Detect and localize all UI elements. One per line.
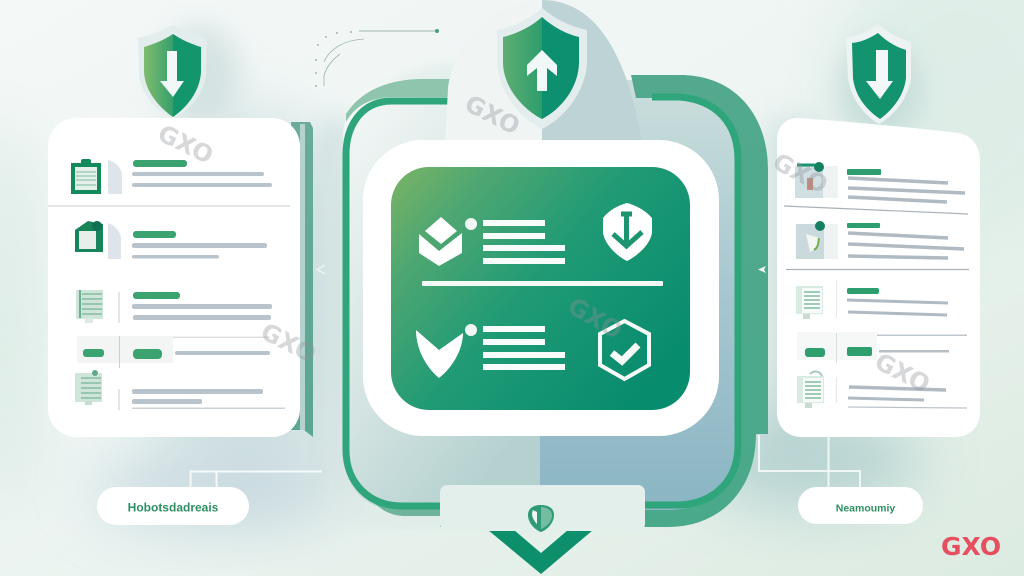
- main white card: [363, 140, 719, 436]
- row 4: [77, 336, 270, 368]
- icon: diamond box: [419, 217, 462, 266]
- bottom plate: [440, 485, 645, 532]
- bottom chevron: [488, 530, 593, 574]
- status dot bottom: [465, 324, 477, 336]
- shield backdrop dome: [445, 0, 642, 140]
- watermarks: GXO: [563, 292, 627, 345]
- arrow: left chevron: [317, 265, 325, 274]
- row 2: [75, 221, 267, 259]
- pill: right label: [798, 487, 923, 524]
- frame band: lower left: [372, 500, 440, 516]
- icon: shield card: [796, 221, 838, 259]
- arrow: right marker: [758, 266, 766, 273]
- pill: left label: Hobotsdadreais: [128, 500, 219, 514]
- watermarks: GXO: [256, 317, 320, 369]
- divider: [422, 281, 663, 286]
- row 3: [796, 280, 948, 319]
- icon: spreadsheet: [76, 290, 103, 323]
- green status panel: [391, 167, 690, 410]
- watermarks: GXO: [460, 89, 524, 141]
- icon: clipboard: [71, 159, 101, 194]
- watermarks: [153, 89, 934, 399]
- watermarks: GXO: [153, 119, 218, 170]
- icon: hexagon check: [600, 321, 649, 379]
- frame line: inner green: [346, 97, 738, 506]
- connector: right pill: [759, 435, 860, 488]
- row 2: [796, 221, 964, 259]
- row 5: [75, 370, 285, 410]
- row 4: [797, 332, 967, 363]
- panel: left checklist: [48, 118, 313, 437]
- icon: clipboard leaf: [75, 221, 103, 252]
- row 1: [71, 159, 272, 194]
- icon: spreadsheet: [797, 372, 824, 408]
- logo: GXO: GXO: [941, 532, 1001, 561]
- icon: shield chevron: [416, 330, 463, 378]
- watermarks: GXO: [768, 148, 832, 199]
- status dot top: [465, 218, 477, 230]
- frame band: right and bottom: [440, 75, 768, 527]
- icon: spreadsheet: [796, 286, 823, 319]
- text lines bottom: [483, 326, 565, 370]
- row 1: [795, 162, 965, 202]
- icon: mini shield: [528, 505, 554, 532]
- decorative dotted arc: [315, 29, 439, 87]
- icon: tag device: [795, 162, 838, 198]
- connector: left pill: [190, 472, 322, 488]
- shield: left down arrow: [138, 25, 207, 118]
- row 3: [76, 290, 272, 323]
- shield: right down arrow: [846, 24, 911, 124]
- central frame: [343, 75, 768, 527]
- icon: spreadsheet: [75, 370, 102, 405]
- panel: right checklist: [777, 118, 980, 437]
- watermarks: GXO: [870, 347, 934, 399]
- shield: centre up arrow: [497, 8, 587, 129]
- icon: shield with down arrow: [603, 203, 652, 261]
- pill: right label: Neamoumiy: [836, 502, 895, 514]
- frame band: upper left: [346, 79, 452, 122]
- text lines top: [483, 220, 565, 264]
- pill: left label: [97, 487, 249, 525]
- row 5: [797, 372, 967, 408]
